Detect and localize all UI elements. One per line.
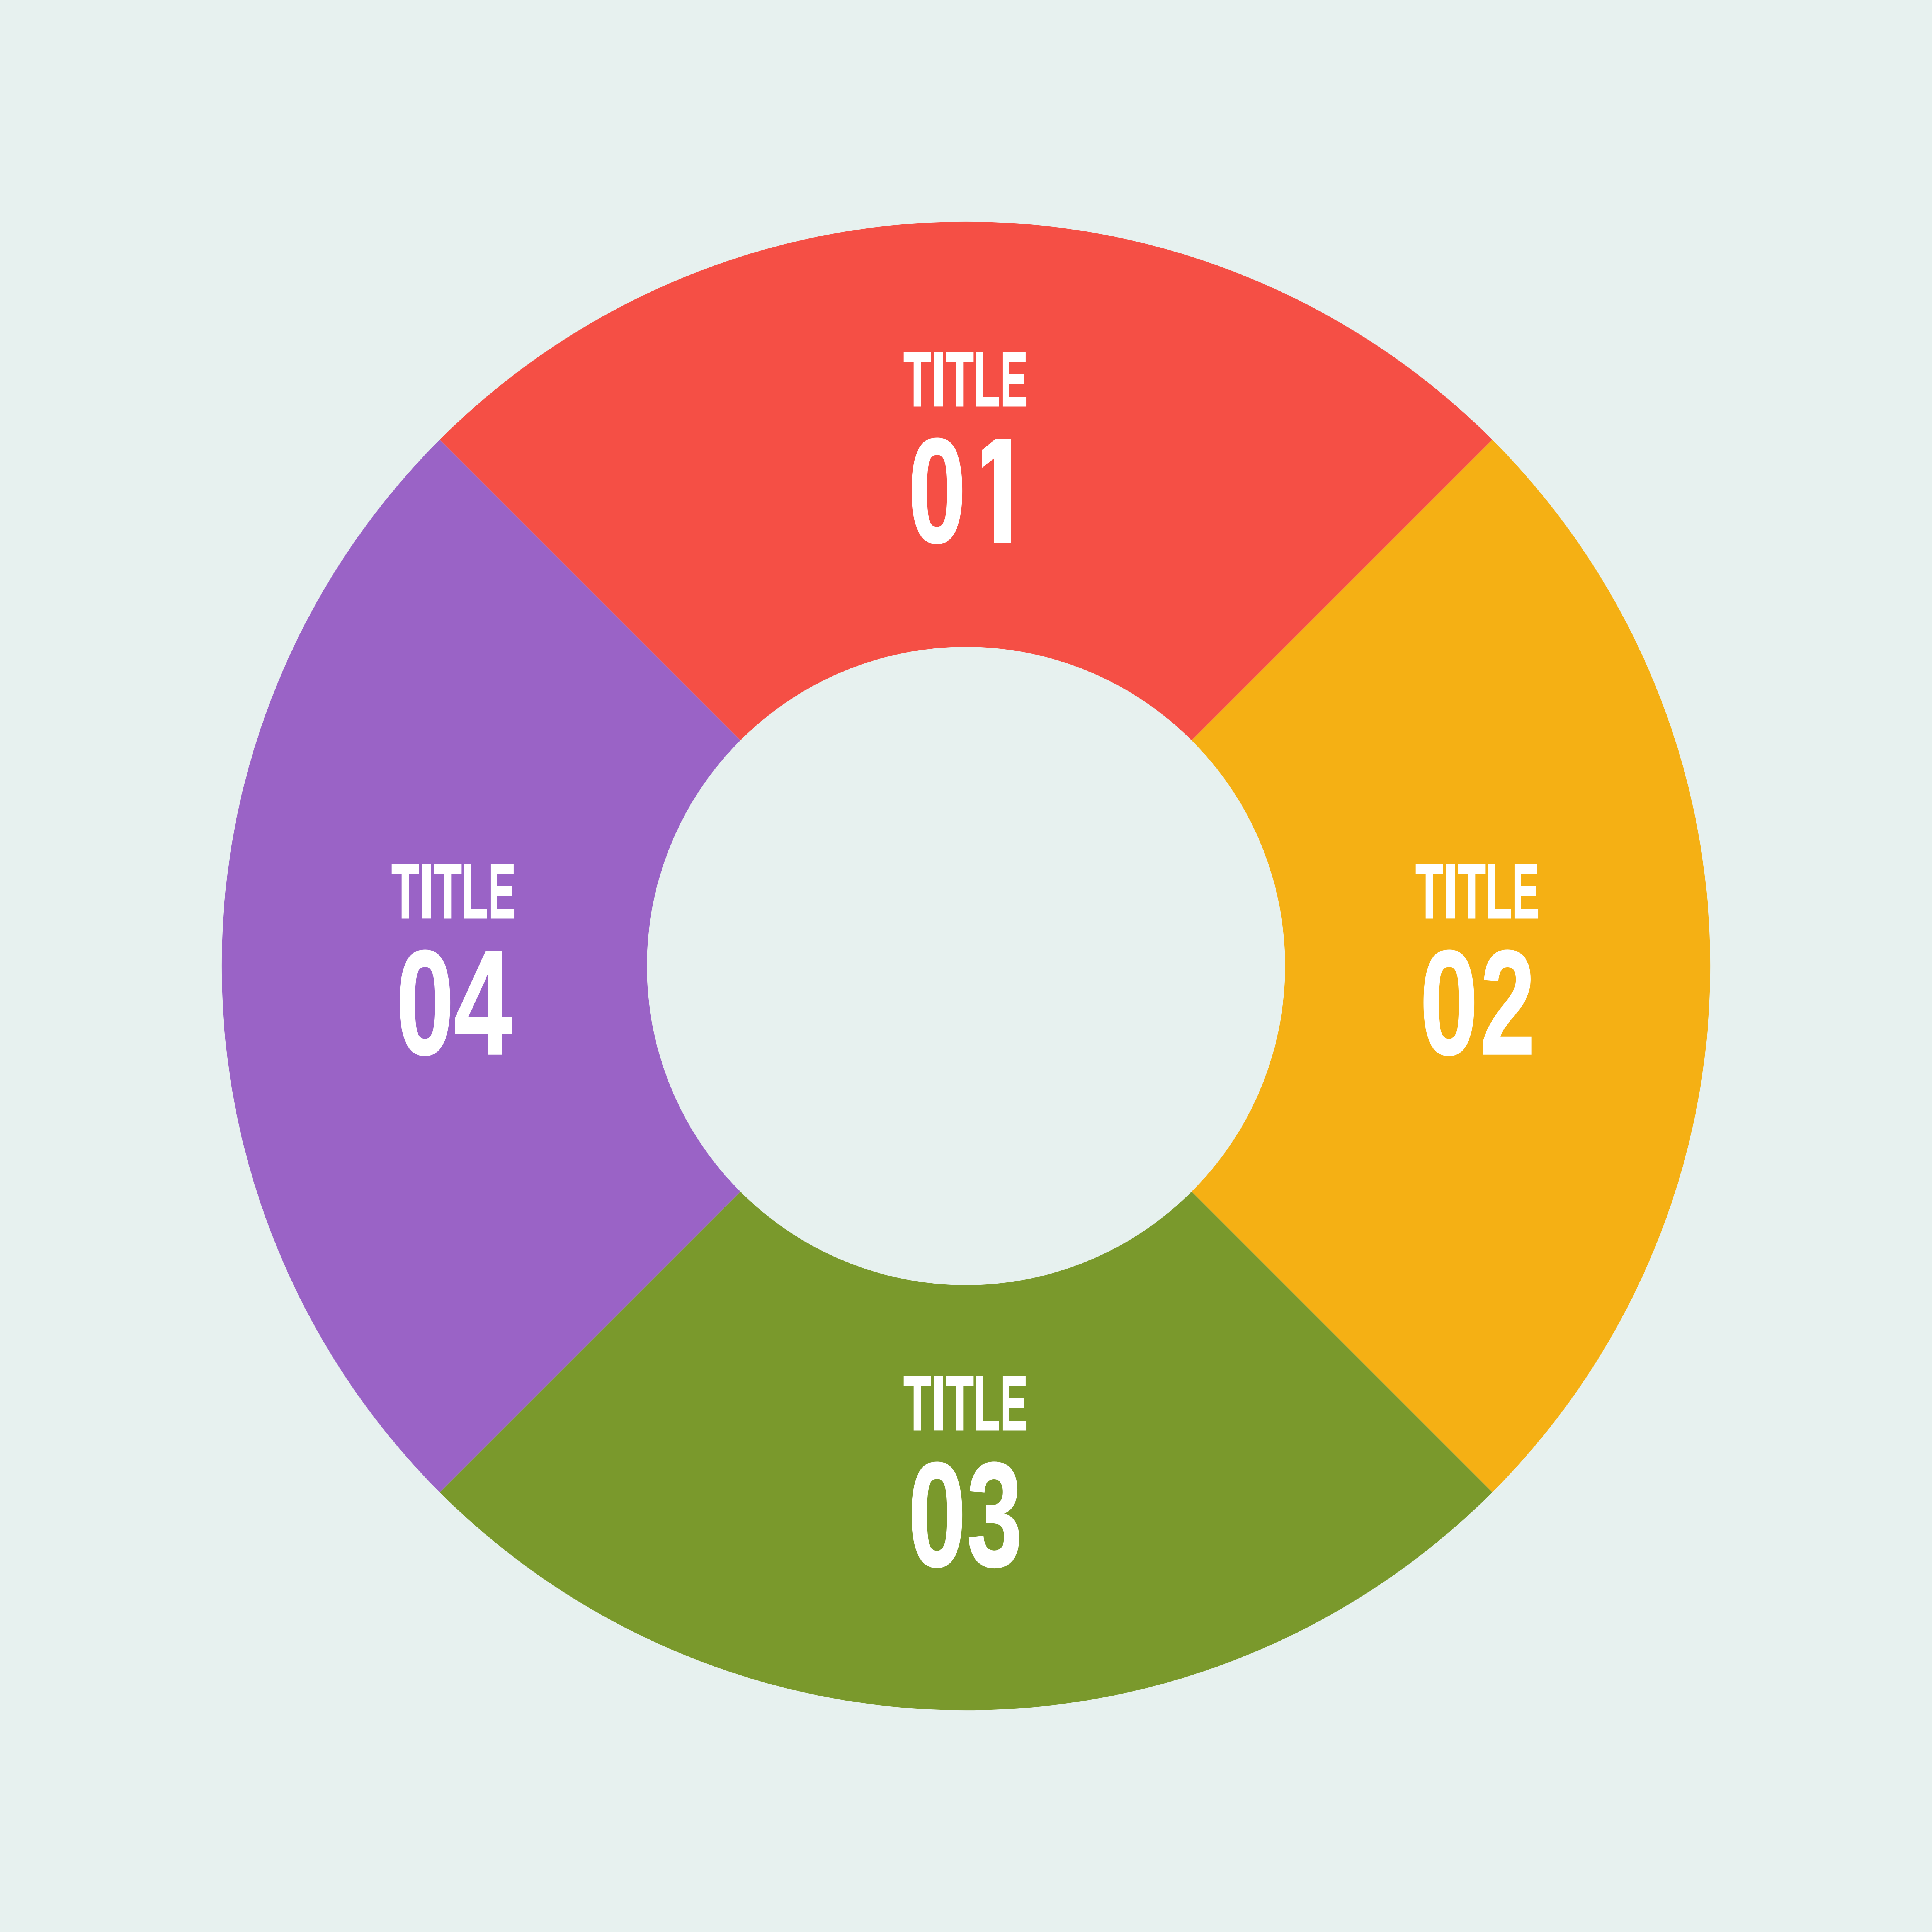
number 02 [1420, 920, 1535, 1086]
number 02: 0 [1420, 920, 1478, 1086]
panel: segment 04 [222, 440, 740, 1492]
heading: title 01: I [930, 337, 947, 423]
heading: title 04: E [488, 848, 515, 934]
heading: title 02 [1415, 848, 1539, 935]
number 03 [908, 1432, 1022, 1598]
heading: title 02: I [1442, 849, 1459, 935]
heading: title 03 [903, 1360, 1027, 1447]
heading: title 04 [391, 848, 515, 935]
panel: segment 01 [440, 222, 1492, 740]
heading: title 02: T [1458, 848, 1486, 935]
red ring segment [440, 222, 1492, 740]
heading: title 04: L [462, 849, 488, 935]
number 04: 0 [396, 920, 454, 1086]
green ring segment [440, 1192, 1492, 1710]
number 01 [912, 437, 1011, 544]
number 01: 0 [908, 408, 966, 574]
number 02: 2 [1480, 920, 1535, 1086]
heading: title 03: I [930, 1361, 947, 1447]
heading: title 04: I [418, 849, 435, 935]
panel: segment 03 [440, 1192, 1492, 1710]
heading: title 03: T [903, 1360, 931, 1447]
number 01: 1 [967, 407, 1033, 574]
heading: title 03: L [974, 1361, 1000, 1447]
number 03: 0 [908, 1432, 966, 1598]
heading: title 04: T [434, 848, 462, 935]
heading: title 01: T [946, 336, 974, 423]
heading: title 03: E [1000, 1360, 1027, 1446]
number 04 [396, 920, 513, 1086]
heading: title 01 [903, 336, 1027, 423]
heading: title 04: T [391, 848, 419, 935]
number 04: 4 [454, 920, 513, 1086]
purple ring segment [222, 440, 740, 1492]
heading: title 01: E [1000, 336, 1027, 422]
panel: segment 02 [1192, 440, 1710, 1492]
heading: title 02: E [1512, 848, 1539, 934]
heading: title 01: L [974, 337, 1000, 423]
heading: title 02: L [1486, 849, 1512, 935]
heading: title 03: T [946, 1360, 974, 1447]
heading: title 02: T [1415, 848, 1443, 935]
number 03: 3 [967, 1432, 1022, 1598]
yellow ring segment [1192, 440, 1710, 1492]
heading: title 01: T [903, 336, 931, 423]
